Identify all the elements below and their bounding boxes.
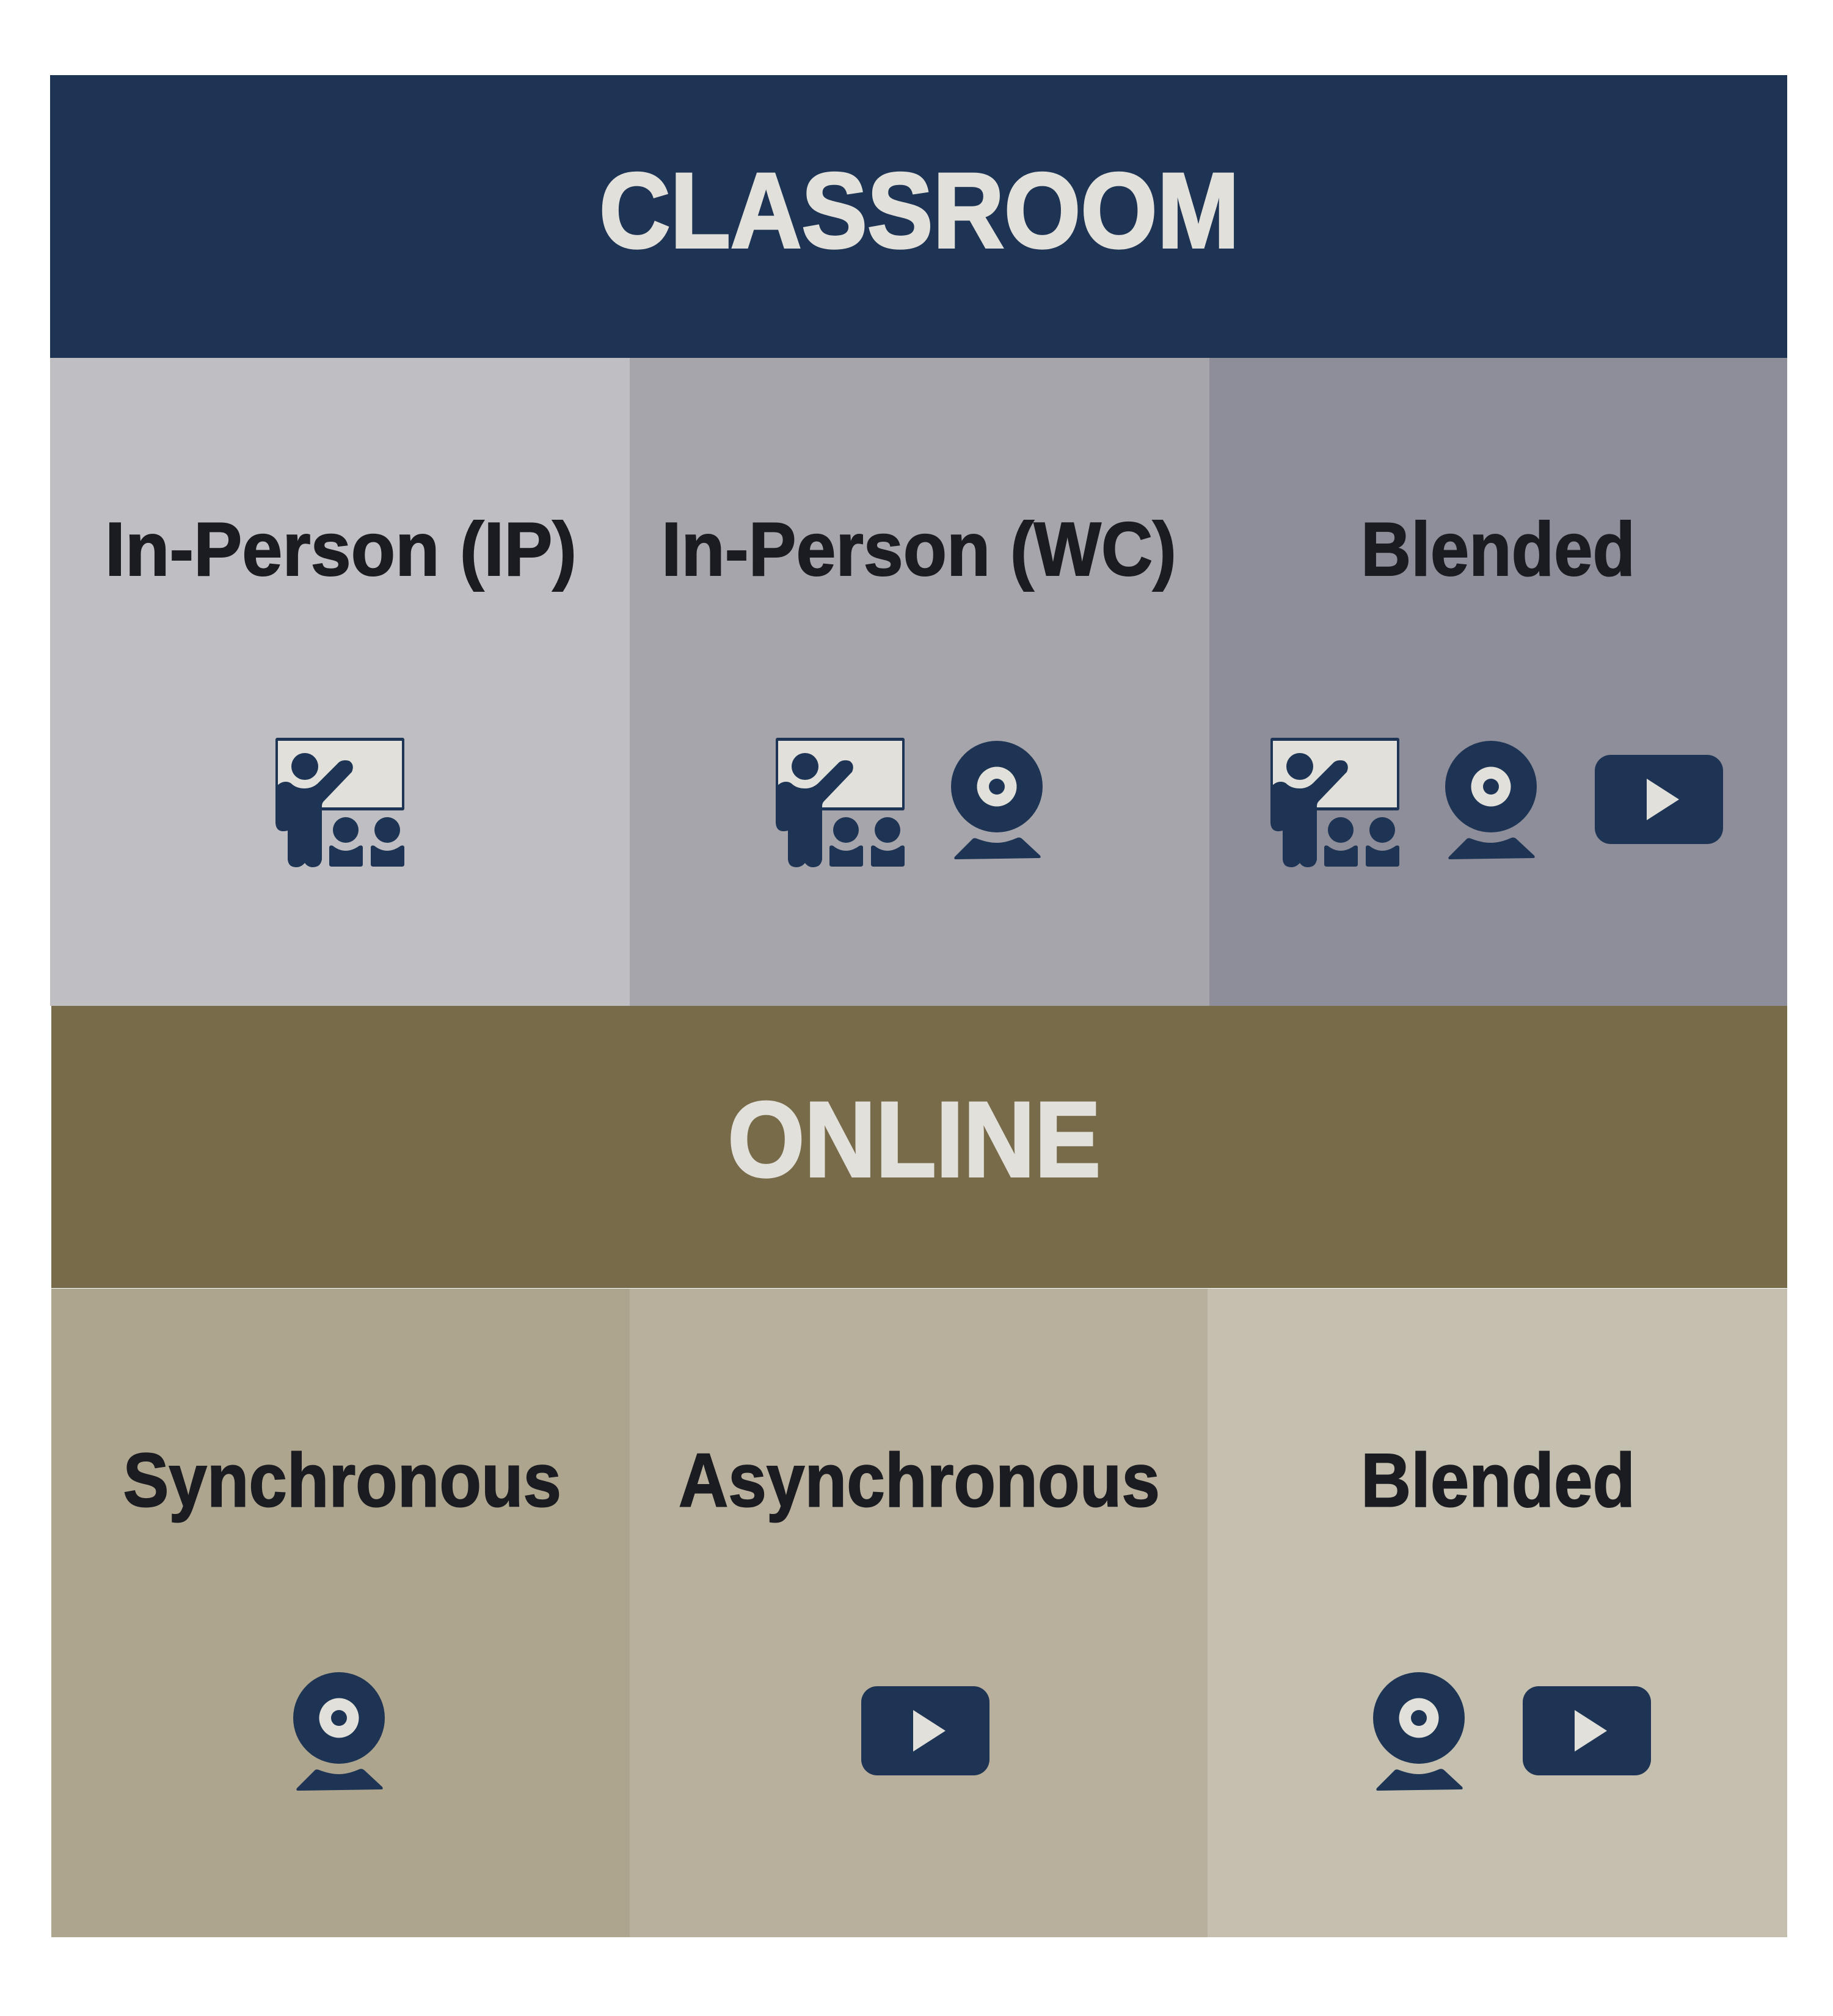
- icon: video play: [861, 1686, 989, 1775]
- label: In-Person (WC): In-Person (WC): [661, 508, 1176, 592]
- icon: teacher with students: [776, 738, 905, 867]
- panel: In-Person (IP): [50, 358, 630, 1006]
- panel: classroom Blended: [1209, 358, 1787, 1006]
- icon: webcam: [1445, 741, 1537, 859]
- icon: teacher with students: [275, 738, 404, 867]
- panel: Synchronous: [51, 1289, 630, 1937]
- panel: online Blended: [1208, 1289, 1787, 1937]
- heading: CLASSROOM: CLASSROOM: [599, 151, 1239, 271]
- icon: webcam: [293, 1672, 385, 1791]
- label: Synchronous: Synchronous: [123, 1439, 561, 1523]
- label: Blended: Blended: [1361, 1439, 1635, 1523]
- panel: classroom header: [50, 75, 1787, 358]
- icon: teacher with students: [1270, 738, 1399, 867]
- panel: Asynchronous: [630, 1289, 1208, 1937]
- label: In-Person (IP): In-Person (IP): [105, 508, 577, 592]
- icon: webcam: [1373, 1672, 1465, 1791]
- icon: video play: [1523, 1686, 1651, 1775]
- icon: video play: [1595, 755, 1723, 844]
- panel: In-Person (WC): [630, 358, 1209, 1006]
- label: Blended: Blended: [1361, 508, 1635, 592]
- icon: webcam: [951, 741, 1043, 859]
- heading: ONLINE: ONLINE: [728, 1080, 1101, 1199]
- label: Asynchronous: Asynchronous: [679, 1439, 1160, 1523]
- panel: online header: [51, 1006, 1787, 1288]
